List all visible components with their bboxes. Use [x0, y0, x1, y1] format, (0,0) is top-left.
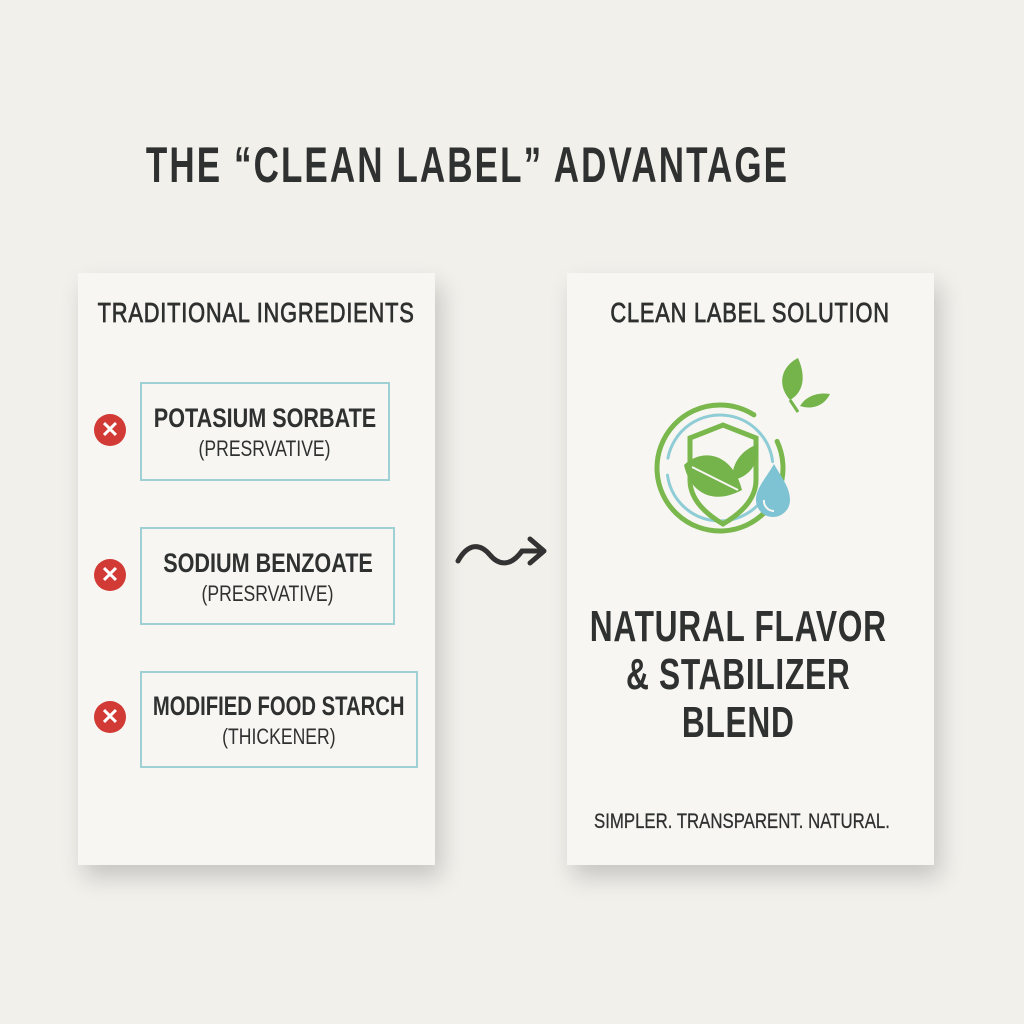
icon: x 2 — [94, 559, 126, 591]
ingredient box 2: (PRESRVATIVE) — [201, 581, 334, 606]
ingredient box 2 — [140, 527, 395, 625]
product name: NATURAL FLAVOR — [590, 602, 887, 651]
icon: x 2: ✕ — [101, 562, 119, 587]
product name: BLEND — [682, 698, 795, 747]
arrow — [456, 536, 546, 566]
ingredient box 1: (PRESRVATIVE) — [199, 436, 331, 461]
ingredient box 1 — [140, 382, 390, 481]
icon: x 3 — [94, 701, 126, 733]
panel: traditional ingredients — [78, 273, 435, 865]
product name — [590, 602, 887, 747]
product name: & STABILIZER — [626, 650, 851, 699]
ingredient box 1: POTASIUM SORBATE — [154, 403, 376, 433]
panel heading: CLEAN LABEL SOLUTION — [611, 297, 890, 328]
ingredient box 2: SODIUM BENZOATE — [163, 548, 372, 578]
panel: clean label solution — [567, 273, 934, 865]
ingredient box 3 — [140, 671, 418, 768]
ingredient box 3: MODIFIED FOOD STARCH — [153, 691, 405, 721]
title: THE “CLEAN LABEL” ADVANTAGE — [145, 137, 789, 193]
icon: x 3: ✕ — [101, 704, 119, 729]
ingredient box 3: (THICKENER) — [222, 724, 336, 749]
icon: x 1: ✕ — [101, 417, 119, 442]
panel heading: TRADITIONAL INGREDIENTS — [98, 297, 415, 328]
icon: x 1 — [94, 414, 126, 446]
tagline: SIMPLER. TRANSPARENT. NATURAL. — [594, 810, 889, 833]
icon: shield leaves water drop — [654, 358, 830, 534]
